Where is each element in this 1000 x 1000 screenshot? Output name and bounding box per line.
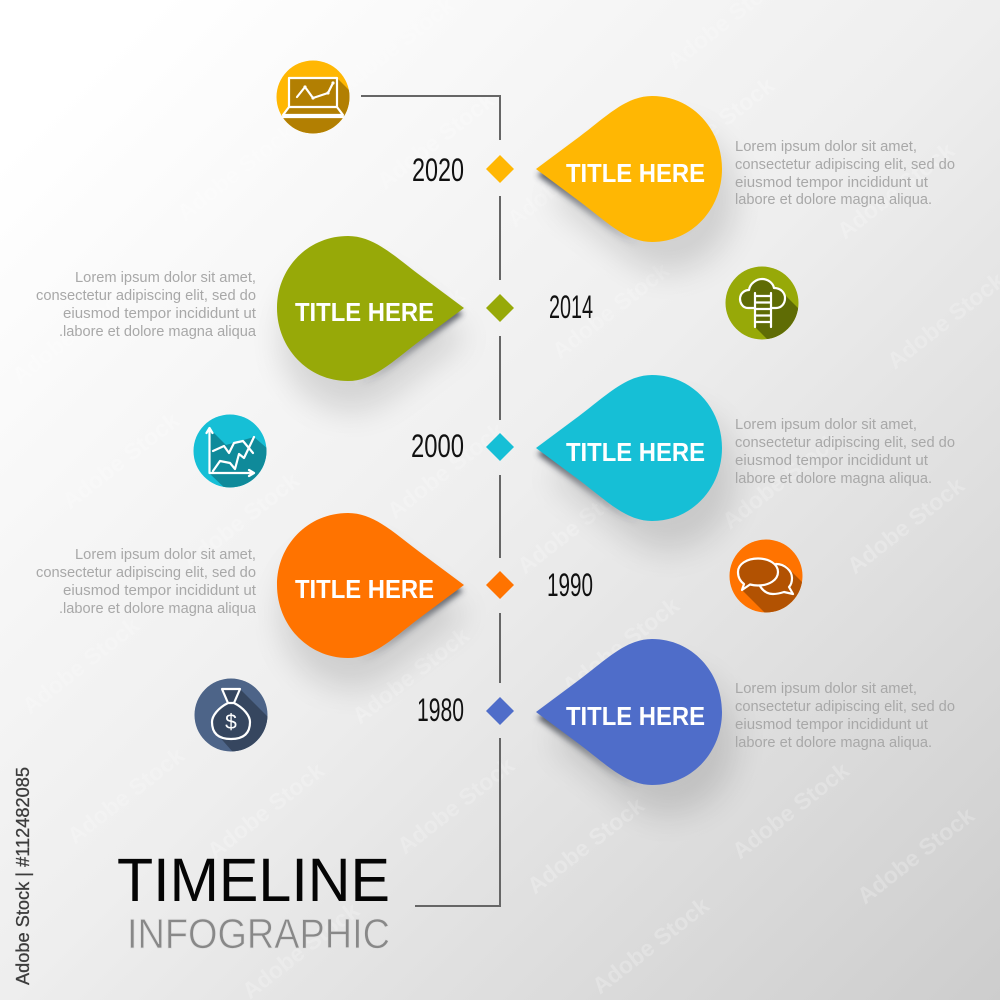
icon: line chart [194,414,266,488]
timeline item 1990 [36,513,593,688]
drop title 2020: TITLE HERE [566,158,705,188]
watermark pattern: Adobe Stock [42,62,169,169]
year 2020: 2020 [412,152,464,188]
watermark pattern: Adobe Stock [842,472,969,579]
description 2020: consectetur adipiscing elit, sed do [735,157,955,173]
description 2000: Lorem ipsum dolor sit amet, [735,417,917,433]
diamond 1990 [486,571,514,599]
watermark pattern: Adobe Stock [852,802,979,909]
diamond 2000 [486,433,514,461]
watermark pattern: Adobe Stock [832,137,959,244]
year 1980: 1980 [417,692,464,728]
watermark pattern: Adobe Stock [587,892,714,999]
description 1990: Lorem ipsum dolor sit amet, [75,547,256,563]
teardrop 2020 [536,96,722,242]
teardrop 1990 [277,513,464,658]
drop title 2000: TITLE HERE [566,437,705,467]
watermark pattern: Adobe Stock [172,119,299,226]
watermark pattern: Adobe Stock [17,612,144,719]
timeline connector line [361,96,500,906]
watermark pattern: Adobe Stock [392,752,519,859]
description 1990: .labore et dolore magna aliqua [59,601,257,617]
watermark pattern: Adobe Stock [727,757,854,864]
watermark pattern: Adobe Stock [382,417,509,524]
description 2014 [36,270,257,340]
description 2000: labore et dolore magna aliqua. [735,471,932,487]
description 2000: eiusmod tempor incididunt ut [735,453,928,469]
description 1980 [735,681,955,751]
timeline item 2000 [411,375,955,551]
timeline item 2020 [412,96,955,272]
drop title 2014: TITLE HERE [295,297,434,327]
description 2020: labore et dolore magna aliqua. [735,192,932,208]
teardrop 2014 [277,236,464,381]
watermark pattern: Adobe Stock [347,622,474,729]
diamond 2020 [486,155,514,183]
watermark pattern: Adobe Stock [372,87,499,194]
description 1980: labore et dolore magna aliqua. [735,735,932,751]
watermark pattern: Adobe Stock [502,125,629,232]
watermark pattern: Adobe Stock [7,282,134,389]
icon: speech bubbles [730,540,802,612]
icon: money bag: $ [225,711,237,734]
drop shadow 2000 [537,381,736,551]
watermark pattern: Adobe Stock [652,72,779,179]
description 2014: .labore et dolore magna aliqua [59,324,257,340]
watermark pattern: Adobe Stock [57,407,184,514]
description 1990 [36,547,257,617]
description 1980: consectetur adipiscing elit, sed do [735,699,955,715]
drop shadow 2014 [276,242,468,411]
diamond 1980 [486,697,514,725]
drop shadow 1980 [537,645,736,815]
heading: timeline: TIMELINE [117,846,390,914]
year 1990: 1990 [547,567,593,603]
drop title 1990: TITLE HERE [295,574,434,604]
timeline item 1980 [417,639,955,815]
description 2020: Lorem ipsum dolor sit amet, [735,139,917,155]
description 2014: eiusmod tempor incididunt ut [63,306,256,322]
watermark pattern: Adobe Stock [62,742,189,849]
stock id side label: Adobe Stock | #112482085 [13,767,33,985]
description 1990: consectetur adipiscing elit, sed do [36,565,256,581]
title [117,846,390,957]
timeline item 2014 [36,236,593,411]
subheading: infographic: INFOGRAPHIC [127,910,390,957]
year 2000: 2000 [411,428,464,464]
diamond 2014 [486,294,514,322]
description 2020 [735,139,955,208]
icon: cloud and ladder [726,266,798,340]
watermark pattern: Adobe Stock [177,467,304,574]
description 2014: consectetur adipiscing elit, sed do [36,288,256,304]
drop shadow 1990 [276,519,468,688]
description 1980: Lorem ipsum dolor sit amet, [735,681,917,697]
drop shadow 2020 [537,102,736,272]
drop title 1980: TITLE HERE [566,701,705,731]
watermark pattern: Adobe Stock [512,472,639,579]
description 2020: eiusmod tempor incididunt ut [735,175,928,191]
teardrop 2000 [536,375,722,521]
icon: laptop chart [276,60,350,134]
icon: money bag [194,678,268,752]
year 2014: 2014 [549,289,593,325]
watermark pattern: Adobe Stock [717,427,844,534]
description 1980: eiusmod tempor incididunt ut [735,717,928,733]
watermark pattern: Adobe Stock [202,757,329,864]
watermark pattern: Adobe Stock [522,792,649,899]
description 1990: eiusmod tempor incididunt ut [63,583,256,599]
watermark pattern: Adobe Stock [342,282,469,389]
teardrop 1980 [536,639,722,785]
watermark pattern: Adobe Stock [547,257,674,364]
description 2014: Lorem ipsum dolor sit amet, [75,270,256,286]
watermark pattern: Adobe Stock [557,592,684,699]
description 2000: consectetur adipiscing elit, sed do [735,435,955,451]
description 2000 [735,417,955,487]
